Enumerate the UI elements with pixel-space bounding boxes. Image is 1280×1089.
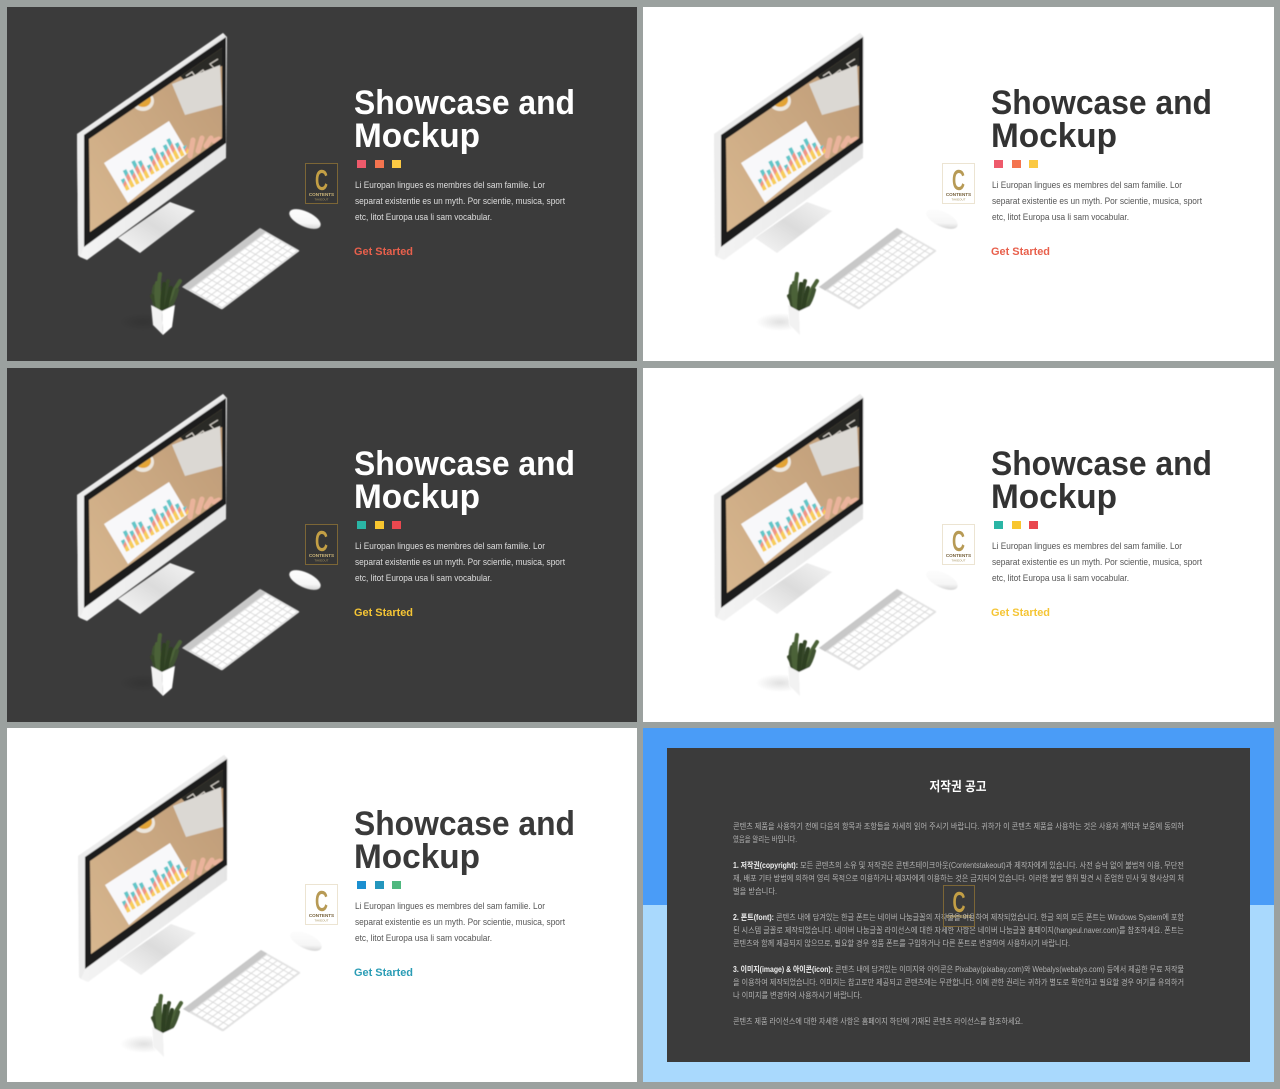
body text bbox=[355, 541, 565, 583]
illustration: desktop mockup bbox=[714, 33, 961, 335]
heading bbox=[991, 445, 1212, 516]
clause 2: font: 콘텐츠 내에 담겨있는 한글 폰트는 네이버 나눔글꼴의 저작물을 이용하여 제작되었습니다. 한글 외의 모든 폰트는 Windows System에 포함 bbox=[776, 912, 1185, 922]
body text: Li Europan lingues es membres del sam familie. Lor bbox=[992, 180, 1182, 190]
heading: Mockup bbox=[354, 838, 480, 876]
body text bbox=[992, 541, 1202, 583]
logo badge bbox=[306, 164, 338, 204]
link: Get Started bbox=[354, 967, 413, 979]
heading bbox=[354, 805, 575, 876]
heading: Showcase and bbox=[354, 445, 575, 483]
heading bbox=[354, 445, 575, 516]
accent squares bbox=[994, 521, 1038, 529]
body text bbox=[355, 180, 565, 222]
logo badge bbox=[942, 164, 974, 204]
logo badge bbox=[306, 524, 338, 564]
clause 1: copyright bbox=[733, 860, 1184, 896]
accent squares bbox=[357, 881, 401, 889]
heading: Mockup bbox=[354, 117, 480, 155]
body text: separat existentie es un myth. Por scientie, musica, sport bbox=[992, 196, 1202, 206]
body text: etc, litot Europa usa li sam vocabular. bbox=[355, 573, 492, 583]
link: Get Started bbox=[354, 607, 413, 619]
heading: Mockup bbox=[991, 117, 1117, 155]
body text: separat existentie es un myth. Por scientie, musica, sport bbox=[355, 196, 565, 206]
clause 1: copyright: 모든 콘텐츠의 소유 및 저작권은 콘텐츠테이크아웃(Contentstakeout)과 제작자에게 있습니다. 사전 승낙 없이 불법적 이용, 무단전 bbox=[800, 860, 1184, 870]
license note: 콘텐츠 제품 라이선스에 대한 자세한 사항은 홈페이지 하단에 기재된 콘텐츠 라이선스를 참조하세요. bbox=[733, 1016, 1023, 1026]
body text bbox=[355, 901, 565, 943]
logo badge bbox=[942, 524, 974, 564]
body text: etc, litot Europa usa li sam vocabular. bbox=[992, 212, 1129, 222]
clause 2: font: 콘텐츠와 함께 제공되지 않으므로, 필요할 경우 정품 폰트를 구입하거나 다른 폰트로 변경하여 사용하시기 바랍니다. bbox=[733, 938, 1070, 948]
body text: Li Europan lingues es membres del sam familie. Lor bbox=[355, 901, 545, 911]
link: Get Started bbox=[991, 607, 1050, 619]
heading: Showcase and bbox=[354, 805, 575, 843]
logo watermark bbox=[944, 886, 974, 926]
clause 3: image and icon: 3. 이미지(image) & 아이콘(icon): bbox=[733, 964, 833, 974]
heading bbox=[354, 84, 575, 155]
body text: Li Europan lingues es membres del sam familie. Lor bbox=[355, 541, 545, 551]
clause 2: font: 2. 폰트(font): bbox=[733, 913, 774, 922]
heading: Showcase and bbox=[991, 445, 1212, 483]
body text: Li Europan lingues es membres del sam familie. Lor bbox=[355, 180, 545, 190]
clause 3: image and icon: 콘텐츠 내에 담겨있는 이미지와 아이콘은 Pixabay(pixabay.com)와 Webalys(webalys.com) 등에서 제공한 무료 저작물 bbox=[835, 964, 1184, 974]
body text: etc, litot Europa usa li sam vocabular. bbox=[355, 933, 492, 943]
clause 3: image and icon: 나 이미지를 변경하여 사용하시기 바랍니다. bbox=[733, 990, 862, 1000]
heading: Showcase and bbox=[991, 84, 1212, 122]
clause 2: font: 된 시스템 글꼴로 제작되었습니다. 네이버 나눔글꼴 라이선스에 대한 자세한 사항은 네이버 나눔글꼴 홈페이지(hangeul.naver.com)를 참조하세요. 폰트는 bbox=[733, 925, 1184, 935]
heading: Showcase and bbox=[354, 84, 575, 122]
link: Get Started bbox=[354, 246, 413, 258]
heading: Mockup bbox=[991, 478, 1117, 516]
link: Get Started bbox=[991, 246, 1050, 258]
intro paragraph: 였음을 알리는 바입니다. bbox=[733, 834, 797, 844]
body text: separat existentie es un myth. Por scientie, musica, sport bbox=[992, 557, 1202, 567]
body text: etc, litot Europa usa li sam vocabular. bbox=[355, 212, 492, 222]
heading bbox=[991, 84, 1212, 155]
logo badge bbox=[306, 884, 338, 924]
panel: copyright notice bbox=[643, 728, 1274, 1082]
accent squares bbox=[357, 521, 401, 529]
clause 2: font bbox=[733, 912, 1185, 948]
panel: light showcase, blue accents bbox=[7, 728, 637, 1082]
illustration: desktop mockup bbox=[77, 33, 324, 335]
illustration: desktop mockup bbox=[714, 394, 961, 696]
body text: separat existentie es un myth. Por scientie, musica, sport bbox=[355, 557, 565, 567]
body text: Li Europan lingues es membres del sam familie. Lor bbox=[992, 541, 1182, 551]
accent squares bbox=[994, 160, 1038, 168]
heading: Mockup bbox=[354, 478, 480, 516]
intro paragraph bbox=[733, 821, 1185, 844]
clause 3: image and icon: 을 이용하여 제작되었습니다. 이미지는 참고로만 제공되고 콘텐츠에는 무관합니다. 이에 관한 권리는 귀하가 별도로 확인하고 필요할 경우 여기를 유의하거 bbox=[733, 977, 1184, 987]
body text: separat existentie es un myth. Por scientie, musica, sport bbox=[355, 917, 565, 927]
clause 3: image and icon bbox=[733, 964, 1184, 1000]
panel: light showcase, warm accents bbox=[643, 7, 1274, 361]
illustration: desktop mockup bbox=[78, 755, 325, 1057]
panel: dark showcase, teal accents bbox=[7, 368, 637, 722]
clause 1: copyright: 1. 저작권(copyright): bbox=[733, 860, 798, 870]
copyright title: 저작권 공고 bbox=[930, 779, 987, 794]
logo watermark: C bbox=[952, 887, 966, 919]
panel: dark showcase, warm accents bbox=[7, 7, 637, 361]
accent squares bbox=[357, 160, 401, 168]
panel: light showcase, teal accents bbox=[643, 368, 1274, 722]
body text: etc, litot Europa usa li sam vocabular. bbox=[992, 573, 1129, 583]
clause 1: copyright: 벌을 받습니다. bbox=[733, 886, 777, 896]
illustration: desktop mockup bbox=[77, 394, 324, 696]
body text bbox=[992, 180, 1202, 222]
clause 1: copyright: 재, 배포 기타 방법에 의하여 영리 목적으로 이용하거나 제3자에게 이용하는 것은 금지되어 있습니다. 이러한 불법 행위 발견 시 준엄한 민사 및 형사상의 처 bbox=[733, 873, 1184, 883]
logo watermark: CONTENTS bbox=[946, 914, 972, 919]
intro paragraph: 콘텐츠 제품을 사용하기 전에 다음의 항목과 조항들을 자세히 읽어 주시기 바랍니다. 귀하가 이 콘텐츠 제품을 사용하는 것은 사용자 계약과 보증에 동의하 bbox=[733, 821, 1185, 831]
